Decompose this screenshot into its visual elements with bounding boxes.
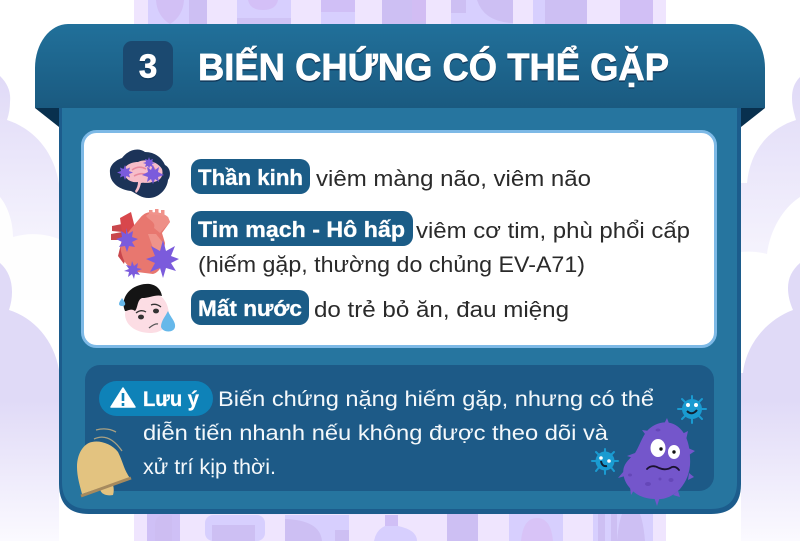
item: Mất nước: do trẻ bỏ ăn, đau miệng (314, 297, 569, 322)
icon: blue virus bottom (592, 449, 618, 474)
note label pill: Lưu ý (143, 388, 199, 411)
title: BIẾN CHỨNG CÓ THỂ GẶP (198, 46, 669, 90)
icon: dehydrated face (119, 284, 175, 333)
panel: note (85, 365, 714, 491)
number badge (123, 41, 173, 91)
number badge: 3 (139, 49, 157, 86)
title: BIẾN CHỨNG CÓ THỂ GẶP (198, 44, 669, 89)
note text: diễn tiến nhanh nếu không được theo dõi và (143, 422, 608, 445)
icon: purple germ (618, 418, 695, 506)
header banner (35, 24, 765, 108)
note label pill (99, 381, 213, 416)
background: right clouds (741, 77, 800, 541)
icon: heart (111, 209, 179, 279)
panel: complications card (82, 132, 716, 346)
icon: blue virus top (678, 396, 706, 423)
item: Tim mạch - Hô hấp: (hiếm gặp, thường do chủng EV-A71) (198, 252, 585, 277)
number badge: 3 (139, 48, 157, 84)
icon: brain (110, 150, 170, 198)
item: Tim mạch - Hô hấp: Tim mạch - Hô hấp (198, 217, 405, 242)
header ribbon folds (35, 108, 765, 127)
background: bottom product band (134, 505, 666, 541)
icon: bell (77, 429, 131, 496)
note text: xử trí kịp thời. (143, 456, 276, 479)
item: Thần kinh: Thần kinh (198, 165, 303, 190)
item: Thần kinh (191, 159, 591, 194)
item: Tim mạch - Hô hấp: viêm cơ tim, phù phổi cấp (416, 218, 690, 243)
item: Mất nước (191, 290, 569, 325)
item: Mất nước: Mất nước (198, 296, 302, 321)
note text: Biến chứng nặng hiếm gặp, nhưng có thể (218, 388, 654, 411)
item: Tim mạch - Hô hấp (191, 211, 690, 277)
note text (143, 388, 654, 479)
background: left clouds (0, 76, 59, 541)
main blue panel (59, 100, 741, 514)
item: Thần kinh: viêm màng não, viêm não (316, 166, 591, 191)
background: top product band (134, 0, 666, 24)
